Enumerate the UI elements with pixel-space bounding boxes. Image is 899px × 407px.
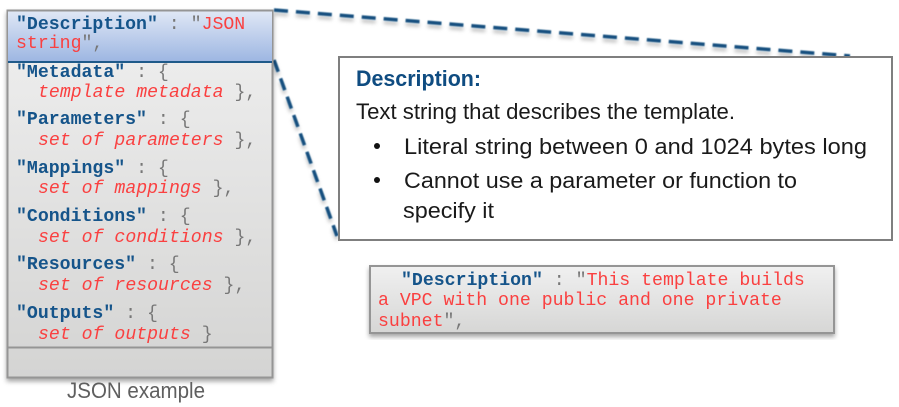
panel: Description code example: "Description" : "This template builds [401,271,805,291]
panel: Description explanation [339,57,892,240]
Mappings entry: set of mappings }, [38,179,234,199]
panel: Description code example: a VPC with one public and one private [378,291,782,311]
Metadata entry: "Metadata" : { [16,63,169,83]
bullet 2: Cannot use a parameter or function to [404,168,797,193]
bullet 2 [374,168,797,223]
panel: Description code example [370,266,834,333]
Outputs entry: "Outputs" : { [16,304,158,324]
Resources entry [16,255,245,296]
Mappings entry [16,159,234,199]
Outputs entry [16,304,213,345]
bullet 2: specify it [403,198,494,223]
Outputs entry: set of outputs } [38,325,213,345]
Parameters entry: set of parameters }, [38,131,256,151]
Metadata entry [16,63,256,103]
panel: Description code example: subnet", [378,312,465,332]
highlighted Description row: "Description" : "JSON [16,15,245,35]
Mappings entry: "Mappings" : { [16,159,169,179]
highlighted Description row: string", [16,34,103,54]
Conditions entry: set of conditions }, [38,228,256,248]
dashed callout line: bottom [274,60,337,236]
Conditions entry [16,207,256,248]
Conditions entry: "Conditions" : { [16,207,191,227]
caption: JSON example: JSON example [67,378,205,403]
Parameters entry: "Parameters" : { [16,110,191,130]
highlighted Description row [8,12,272,62]
Parameters entry [16,110,256,151]
Resources entry: set of resources }, [38,276,245,296]
Resources entry: "Resources" : { [16,255,180,275]
heading: Description: [356,66,481,91]
dashed callout line: top [274,10,850,56]
Metadata entry: template metadata }, [38,83,256,103]
bullet 1: Literal string between 0 and 1024 bytes long [404,134,867,159]
intro text: Text string that describes the template. [356,99,735,124]
panel: JSON template [8,10,272,378]
